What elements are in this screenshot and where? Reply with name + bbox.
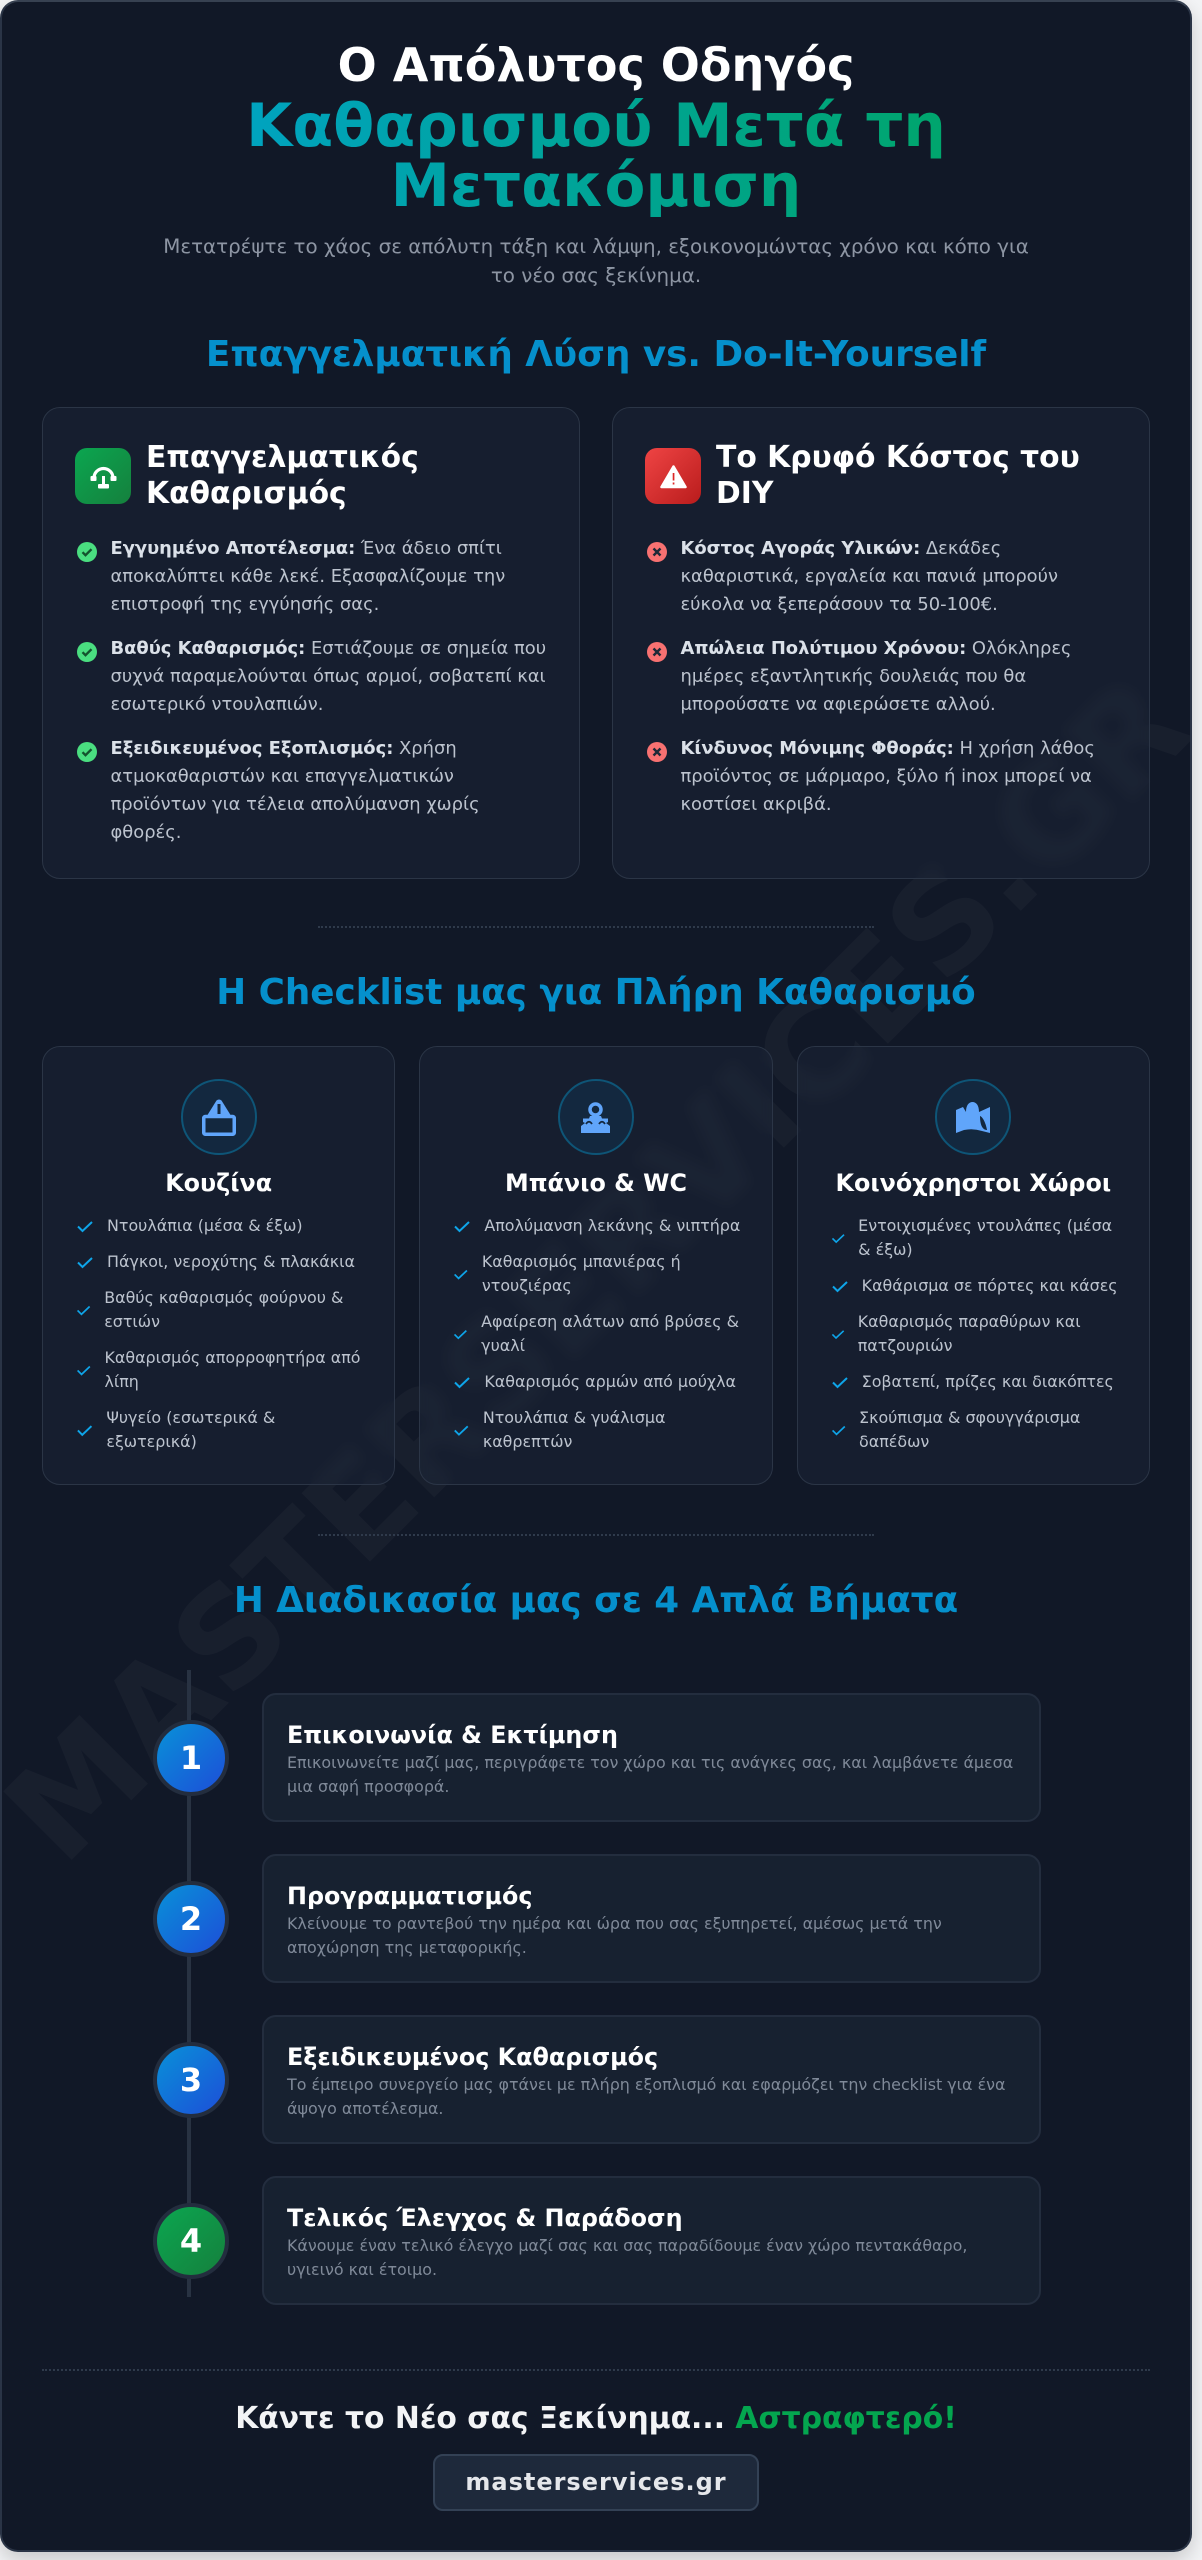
panel heading: DIY [716,476,773,511]
kitchen checklist: Ψυγείο (εσωτερικά & εξωτερικά) [106,1408,275,1451]
panel heading [75,440,419,511]
step 2 card: Κλείνουμε το ραντεβού την ημέρα και ώρα που σας εξυπηρετεί, αμέσως μετά την [287,1914,942,1933]
item: προϊόντος σε μάρμαρο, ξύλο ή inox μπορεί να [680,766,1092,787]
title: Ο Απόλυτος Οδηγός [338,38,854,92]
panel: professional cleaning [42,407,580,879]
panel heading: Επαγγελματικός [146,440,419,475]
item [77,738,480,843]
panel: common areas: Κοινόχρηστοι Χώροι [836,1169,1111,1197]
item: φθορές. [110,822,181,843]
bathroom checklist [454,1216,740,1451]
step 3 card: Το έμπειρο συνεργείο μας φτάνει με πλήρη εξοπλισμό και εφαρμόζει την checklist για ένα [287,2075,1006,2094]
item: αποκαλύπτει κάθε λεκέ. Εξασφαλίζουμε την [110,566,505,587]
panel: kitchen [42,1046,395,1485]
kitchen checklist: Καθαρισμός απορροφητήρα από λίπη [104,1348,361,1391]
common areas checklist: Καθάρισμα σε πόρτες και κάσες [862,1276,1118,1295]
item: μπορούσατε να αφιερώσετε αλλού. [680,694,996,715]
icon: headset [75,448,131,504]
heading: checklist: Η Checklist μας για Πλήρη Καθαρισμό [216,972,976,1013]
item: Απώλεια Πολύτιμου Χρόνου: Ολόκληρες [680,638,1072,659]
heading: process: Η Διαδικασία μας σε 4 Απλά Βήματα [234,1580,958,1621]
item: εύκολα να ξεπεράσουν τα 50-100€. [680,594,998,615]
item: εσωτερικό ντουλαπιών. [110,694,323,715]
step 3 card: άψογο αποτέλεσμα. [287,2099,443,2118]
footer call to action: Κάντε το Νέο σας Ξεκίνημα... Αστραφτερό! [235,2401,957,2436]
step 1 number: 1 [180,1739,202,1777]
website button [433,2454,759,2511]
step 4 number [153,2203,229,2279]
step 2 card [262,1854,1041,1983]
step 2 number: 2 [180,1900,202,1938]
bathroom checklist: Καθαρισμός αρμών από μούχλα [484,1372,736,1391]
pros list [77,538,546,843]
cons list [647,538,1095,815]
heading: comparison: Επαγγελματική Λύση vs. Do-It-Yourself [206,334,986,375]
common areas checklist: Σοβατεπί, πρίζες και διακόπτες [862,1372,1114,1391]
step 4 card: υγιεινό και έτοιμο. [287,2260,437,2279]
item [77,538,505,615]
icon: kitchen [181,1079,257,1155]
item: ημέρες εξαντλητικής δουλειάς που θα [680,666,1026,687]
item: επιστροφή της εγγύησής σας. [110,594,379,615]
bathroom checklist: Αφαίρεση αλάτων από βρύσες & γυαλί [481,1312,739,1355]
step 1 card: Επικοινωνία & Εκτίμηση [287,1721,618,1749]
item: Εγγυημένο Αποτέλεσμα: Ένα άδειο σπίτι [110,538,502,559]
item [647,538,1058,615]
common areas checklist [832,1216,1118,1451]
item: κοστίσει ακριβά. [680,794,832,815]
step 2 card: αποχώρηση της μεταφορικής. [287,1938,527,1957]
icon: common areas [935,1079,1011,1155]
step 2 number [153,1881,229,1957]
panel heading: Το Κρυφό Κόστος του [716,440,1080,475]
common areas checklist: Εντοιχισμένες ντουλάπες (μέσα & έξω) [858,1216,1112,1259]
gradient title [40,97,1152,217]
panel: bathroom: Μπάνιο & WC [505,1169,687,1197]
step 3 card [262,2015,1041,2144]
timeline line [187,1670,191,2297]
item: συχνά παραμελούνται όπως αρμοί, σοβατεπί και [110,666,546,687]
kitchen checklist: Βαθύς καθαρισμός φούρνου & εστιών [104,1288,343,1331]
step 4 card: Κάνουμε έναν τελικό έλεγχο μαζί σας και σας παραδίδουμε έναν χώρο πεντακάθαρο, [287,2236,967,2255]
item: Κίνδυνος Μόνιμης Φθοράς: Η χρήση λάθος [680,738,1095,759]
panel: hidden cost of DIY [612,407,1150,879]
item: καθαριστικά, εργαλεία και πανιά μπορούν [680,566,1058,587]
item: προϊόντων για τέλεια απολύμανση χωρίς [110,794,480,815]
subtitle: το νέο σας ξεκίνημα. [491,264,701,287]
item [647,638,1072,715]
panel heading [645,440,1080,511]
bathroom checklist: Απολύμανση λεκάνης & νιπτήρα [484,1216,740,1235]
step 1 card: Επικοινωνείτε μαζί μας, περιγράφετε τον χώρο και τις ανάγκες σας, και λαμβάνετε άμεσα [287,1753,1013,1772]
subtitle [163,235,1029,287]
kitchen checklist: Ντουλάπια (μέσα & έξω) [107,1216,303,1235]
website button: masterservices.gr [465,2468,727,2496]
item [77,638,546,715]
step 1 number [153,1720,229,1796]
icon: bathroom [558,1079,634,1155]
item: ατμοκαθαριστών και επαγγελματικών [110,766,454,787]
kitchen checklist [77,1216,361,1451]
subtitle: Μετατρέψτε το χάος σε απόλυτη τάξη και λάμψη, εξοικονομώντας χρόνο και κόπο για [163,235,1029,258]
step 3 number: 3 [180,2061,202,2099]
item [647,738,1095,815]
panel: bathroom [419,1046,773,1485]
step 4 card: Τελικός Έλεγχος & Παράδοση [287,2204,683,2232]
step 2 card: Προγραμματισμός [287,1882,533,1910]
gradient title: Μετακόμιση [391,152,801,221]
panel: common areas [797,1046,1150,1485]
step 1 card [262,1693,1041,1822]
gradient title: Καθαρισμού Μετά τη [246,92,946,161]
step 1 card: μια σαφή προσφορά. [287,1777,449,1796]
item: Εξειδικευμένος Εξοπλισμός: Χρήση [110,738,457,759]
item: Βαθύς Καθαρισμός: Εστιάζουμε σε σημεία που [110,638,546,659]
panel: kitchen: Κουζίνα [165,1169,272,1197]
item: Κόστος Αγοράς Υλικών: Δεκάδες [680,538,1001,559]
common areas checklist: Καθαρισμός παραθύρων και πατζουριών [858,1312,1081,1355]
common areas checklist: Σκούπισμα & σφουγγάρισμα δαπέδων [859,1408,1080,1451]
step 4 number: 4 [180,2222,202,2260]
step 3 card: Εξειδικευμένος Καθαρισμός [287,2043,658,2071]
step 3 number [153,2042,229,2118]
icon: warning [645,448,701,504]
bathroom checklist: Καθαρισμός μπανιέρας ή ντουζιέρας [482,1252,681,1295]
panel heading: Καθαρισμός [146,476,347,511]
kitchen checklist: Πάγκοι, νεροχύτης & πλακάκια [107,1252,355,1271]
bathroom checklist: Ντουλάπια & γυάλισμα καθρεπτών [483,1408,666,1451]
step 4 card [262,2176,1041,2305]
